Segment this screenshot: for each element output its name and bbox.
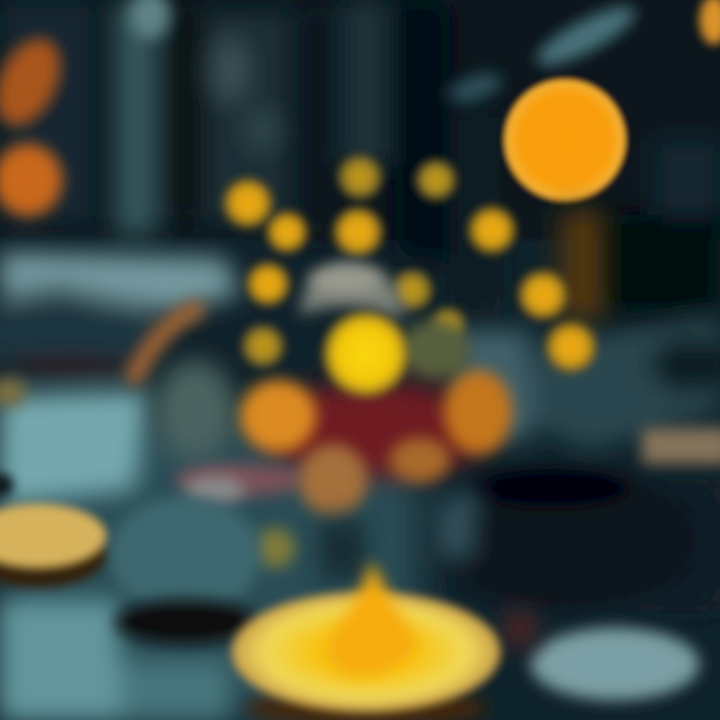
red fruit mass	[260, 382, 490, 478]
golden dish at far left	[0, 504, 106, 588]
right side dark forms	[455, 315, 720, 610]
pale blue leaves upper right	[130, 0, 642, 108]
pale bowl at lower right	[505, 612, 699, 700]
small amber glint at left edge	[0, 378, 26, 406]
small floating gold orbs	[224, 155, 596, 372]
foliage behind the center	[155, 360, 235, 460]
wood tray at right edge	[642, 428, 720, 464]
small dark bowl rim at left edge	[0, 473, 14, 497]
teal counter band on the left	[0, 252, 240, 720]
flame	[329, 560, 420, 676]
glowing golden bowl with flame at bottom	[232, 560, 500, 720]
orange fruit left	[240, 380, 316, 452]
central plant and lamp composition	[155, 262, 512, 580]
dark columns in the upper background	[0, 0, 720, 320]
stem	[320, 520, 365, 580]
amber column below the sun	[560, 210, 604, 320]
dark bowl at right	[435, 470, 695, 608]
dome over lamp	[300, 262, 405, 320]
orange fruit right	[444, 370, 512, 454]
orange branch at left	[135, 310, 195, 375]
large glowing orange sun	[505, 80, 625, 200]
orange leaves at upper left	[0, 0, 720, 216]
glowing yellow lamp	[324, 312, 408, 396]
tan fruit lower	[299, 444, 367, 516]
teal bowl at lower center-left	[109, 497, 261, 644]
